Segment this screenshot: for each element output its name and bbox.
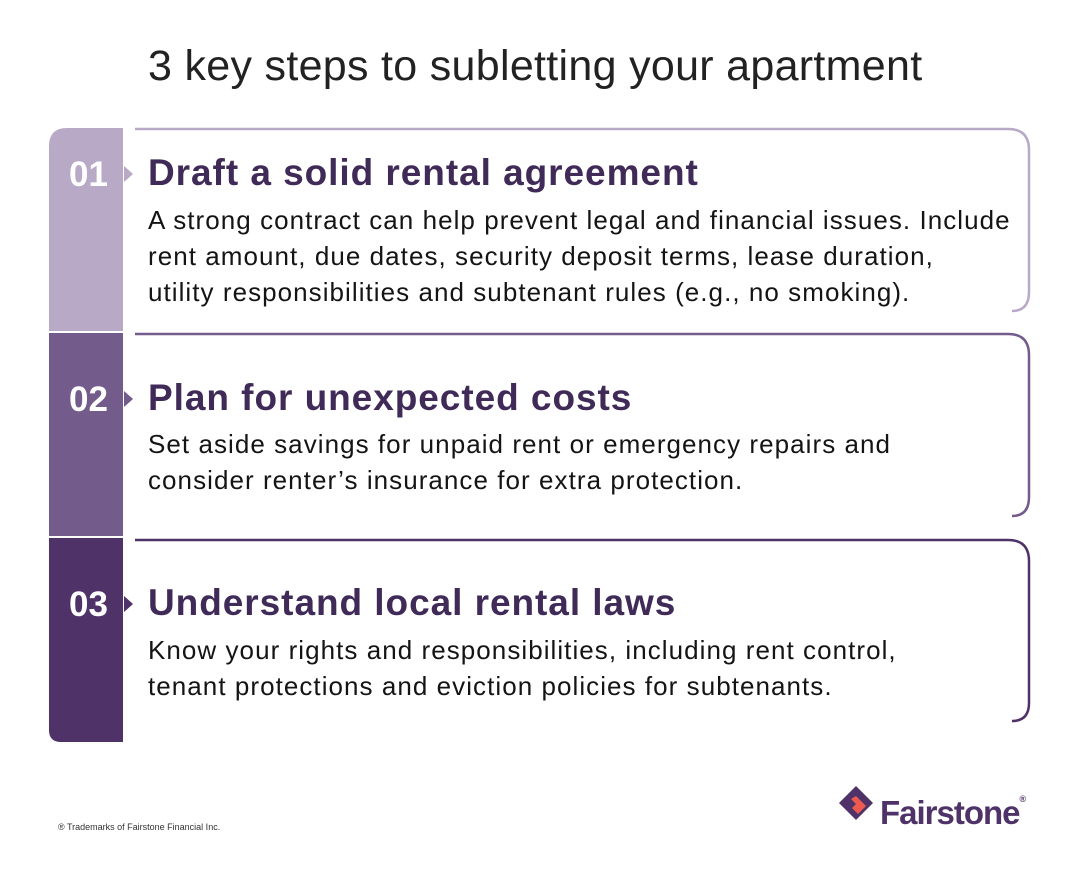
number 02: 02 xyxy=(69,380,108,419)
step bar 2 xyxy=(49,333,123,536)
number 03: 03 xyxy=(69,585,108,624)
body 2: consider renter’s insurance for extra protection. xyxy=(148,465,743,495)
body 1 xyxy=(148,205,1011,307)
number 01: 01 xyxy=(69,155,108,194)
heading 3: Understand local rental laws xyxy=(148,582,676,623)
box outline 3 xyxy=(135,540,1029,721)
title: 3 key steps to subletting your apartment xyxy=(148,42,922,90)
body 2: Set aside savings for unpaid rent or emergency repairs and xyxy=(148,429,891,459)
body 1: A strong contract can help prevent legal and financial issues. Include xyxy=(148,205,1011,235)
body 3 xyxy=(148,635,897,701)
step bar 3 xyxy=(49,538,123,742)
arrows xyxy=(124,166,133,612)
body 1: utility responsibilities and subtenant rules (e.g., no smoking). xyxy=(148,277,910,307)
box outline 2 xyxy=(135,334,1029,516)
body 2 xyxy=(148,429,891,495)
body 3: Know your rights and responsibilities, including rent control, xyxy=(148,635,897,665)
footnote: ® Trademarks of Fairstone Financial Inc. xyxy=(58,822,220,832)
logo text: Fairstone® xyxy=(880,794,1025,831)
body 3: tenant protections and eviction policies for subtenants. xyxy=(148,671,833,701)
heading 2: Plan for unexpected costs xyxy=(148,377,632,418)
step bar 1 xyxy=(49,128,123,331)
logo icon xyxy=(839,786,873,820)
heading 1: Draft a solid rental agreement xyxy=(148,152,699,193)
logo xyxy=(839,786,1026,831)
box outline 1 xyxy=(135,129,1029,311)
body 1: rent amount, due dates, security deposit terms, lease duration, xyxy=(148,241,934,271)
